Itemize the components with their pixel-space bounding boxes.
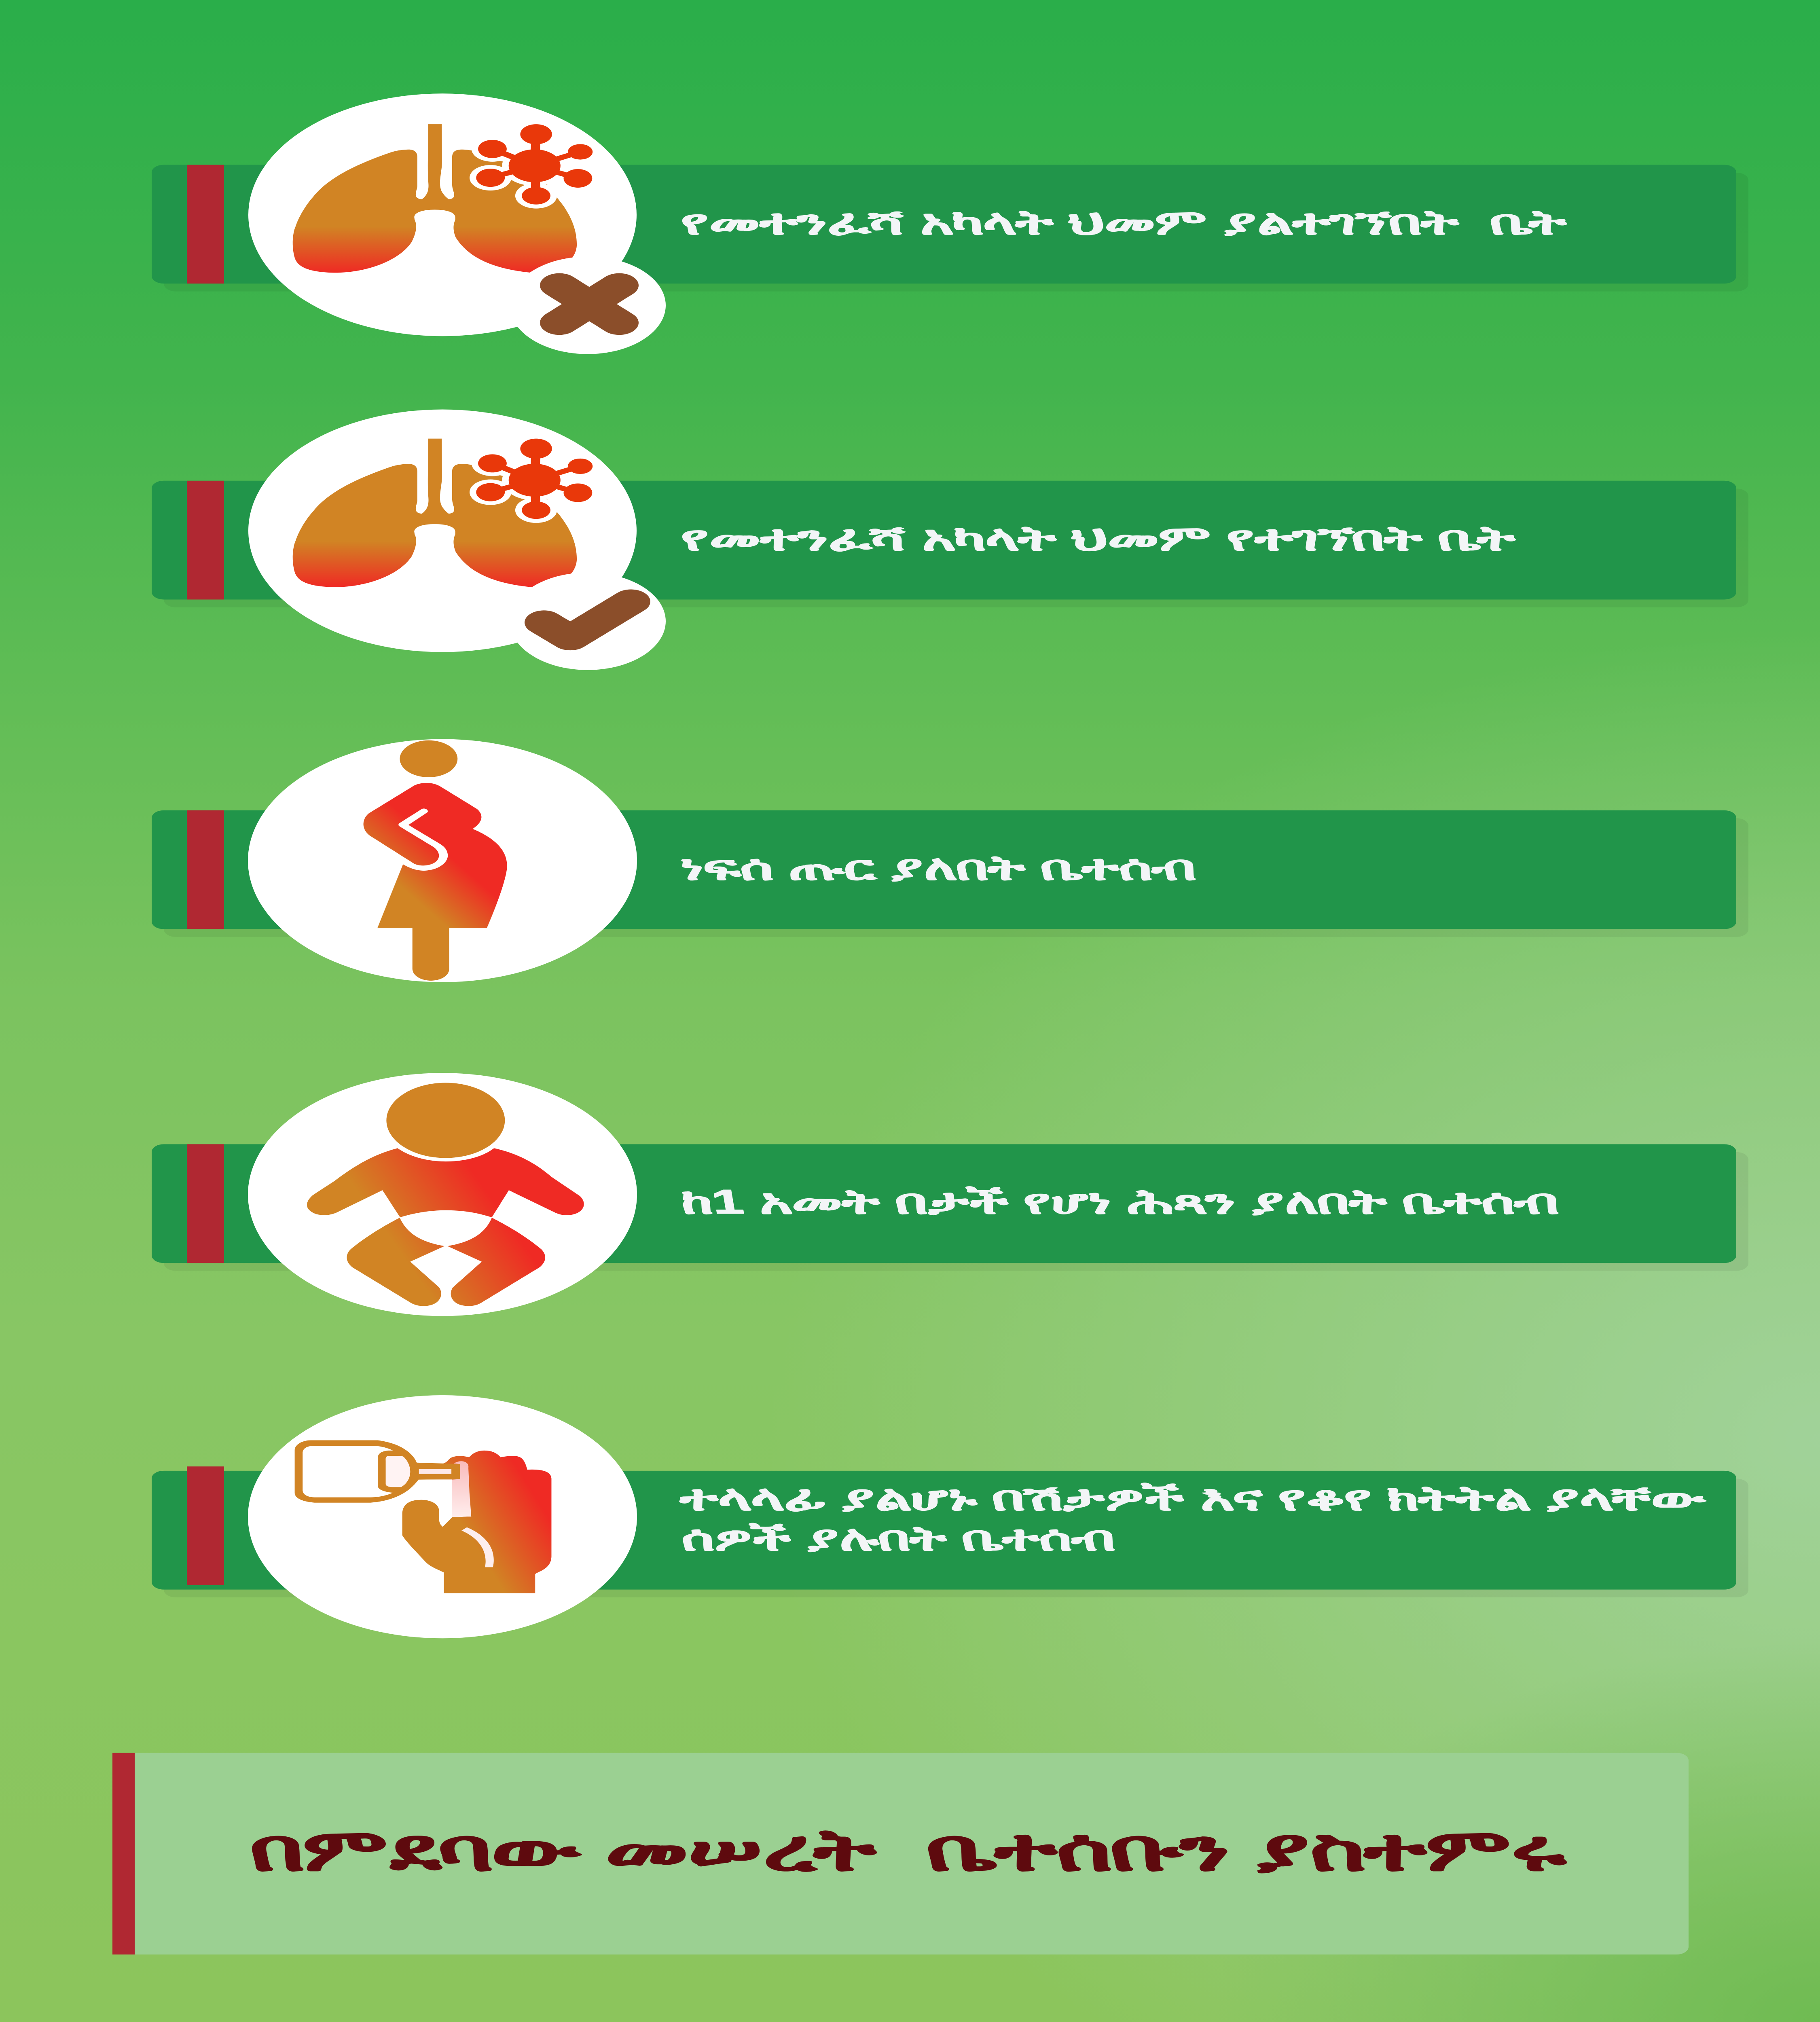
bar shadow bbox=[164, 1152, 1748, 1271]
green bar bbox=[152, 1471, 1736, 1590]
light green panel bbox=[112, 1753, 1689, 1954]
heading text: በምደባው መሠረት ቤተሰቡን ያስተምሩ bbox=[244, 1818, 1570, 1882]
white circle bbox=[248, 409, 637, 652]
label text: ነፍሰ ጡር ያለበት ቤተሰብ bbox=[678, 849, 1198, 887]
bar shadow bbox=[164, 173, 1748, 292]
icon: lungs bbox=[293, 439, 577, 587]
icon: brown cross bbox=[559, 286, 619, 323]
green bar bbox=[152, 1144, 1736, 1263]
panel: row 3, pregnant woman bbox=[152, 739, 1748, 982]
red accent bbox=[187, 1466, 224, 1585]
panel: row 4, infant under one year bbox=[152, 1073, 1748, 1316]
icon: virus bbox=[473, 124, 593, 207]
label text bbox=[676, 1479, 1709, 1557]
badge circle bbox=[510, 256, 666, 354]
panel: row 5, chronic illness bbox=[152, 1395, 1748, 1638]
red accent bbox=[187, 165, 224, 283]
red accent bbox=[187, 1144, 224, 1263]
bar shadow bbox=[164, 1478, 1748, 1597]
icon: brown check mark bbox=[544, 602, 631, 638]
panel: row 1, respiratory illness not found bbox=[152, 93, 1748, 354]
panel: bottom instruction bbox=[112, 1753, 1689, 1954]
green bar bbox=[152, 165, 1736, 283]
white circle bbox=[248, 1073, 637, 1316]
label text: ከ1 አመት በታች የሆነ ሕጻን ያለበት ቤተሰብ bbox=[678, 1182, 1561, 1221]
green bar bbox=[152, 810, 1736, 929]
white circle bbox=[248, 739, 637, 982]
icon: virus bbox=[473, 439, 593, 521]
white circle bbox=[248, 1395, 637, 1638]
badge circle bbox=[510, 573, 666, 670]
icon: baby bbox=[307, 1083, 584, 1306]
red accent bbox=[187, 810, 224, 929]
icon: pregnant woman bbox=[364, 740, 507, 981]
label text: የመተንፈሻ አካላት ህመም የተገኘበት ቤት bbox=[678, 519, 1518, 557]
red accent bbox=[112, 1753, 135, 1954]
red accent bbox=[187, 481, 224, 599]
bar shadow bbox=[164, 818, 1748, 937]
label text: ተላላፊ ያልሆኑ በሽታዎች እና የቆየ ክትትል ያላቸው bbox=[676, 1479, 1709, 1517]
white circle bbox=[248, 93, 637, 336]
icon: hand with pulse oximeter bbox=[295, 1440, 551, 1593]
panel: row 2, respiratory illness found bbox=[152, 409, 1748, 670]
label text: የመተንፈሻ አካላት ህመም ያልተገኘበት ቤት bbox=[678, 203, 1570, 241]
label text: ሰዎች ያሉበት ቤተሰብ bbox=[678, 1519, 1117, 1557]
green bar bbox=[152, 481, 1736, 599]
icon: lungs bbox=[293, 124, 577, 273]
bar shadow bbox=[164, 489, 1748, 607]
